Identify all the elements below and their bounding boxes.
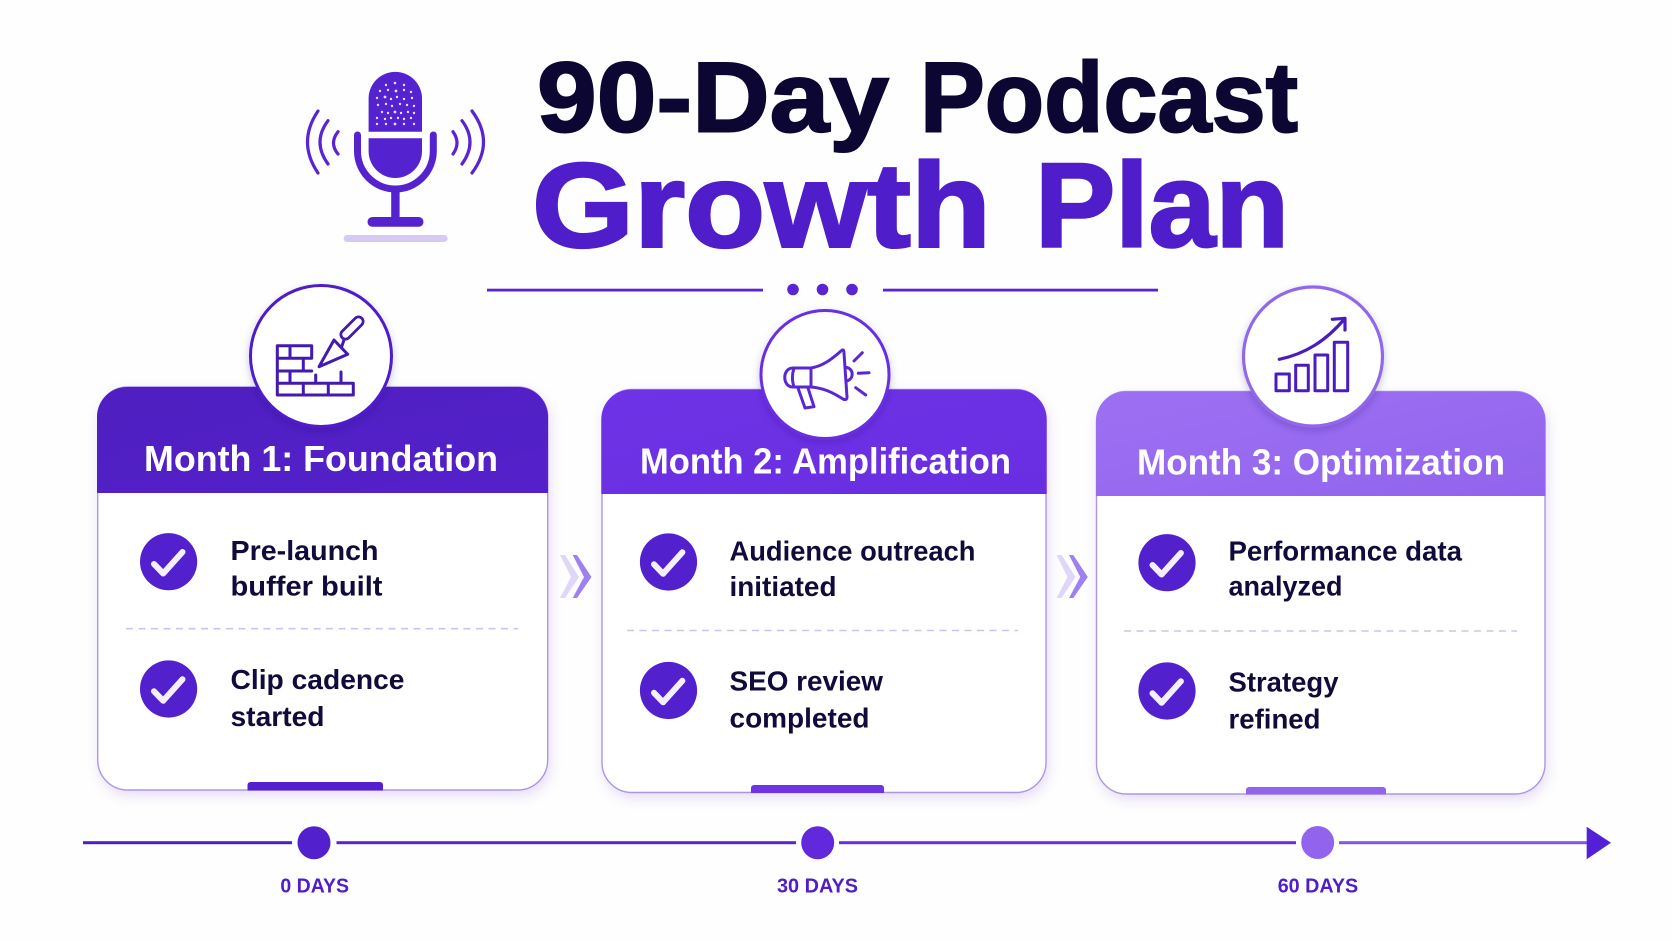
timeline line <box>83 841 1587 844</box>
checklist item: strategy refined <box>1138 662 1339 734</box>
card accent tab <box>1246 787 1386 794</box>
card body <box>1096 392 1545 794</box>
panel: month 1 foundation <box>97 286 548 790</box>
heading: Month 3: Optimization <box>1137 442 1505 482</box>
icon: rising bar chart <box>1244 287 1382 426</box>
panel: month 3 optimization <box>1096 287 1546 794</box>
microphone stem <box>391 190 400 220</box>
shadow bar <box>344 235 448 242</box>
card body <box>602 390 1046 792</box>
marker: 60 days: 60 DAYS <box>1278 876 1358 898</box>
arrow: chevrons 1 to 2 <box>560 555 592 598</box>
checklist item: audience outreach <box>640 533 976 602</box>
title word: 90-Day: 90-Day <box>537 42 889 153</box>
marker: 60 days <box>1278 826 1358 898</box>
heading: Month 2: Amplification <box>640 440 1011 482</box>
card accent tab <box>248 782 383 790</box>
checklist item: seo review: completed <box>730 702 870 734</box>
checklist item: pre-launch buffer: buffer built <box>230 571 382 602</box>
icon: megaphone <box>761 310 889 438</box>
card body <box>98 387 548 790</box>
microphone cradle <box>358 135 433 189</box>
heading: Month 1: Foundation <box>144 438 498 479</box>
card accent tab <box>751 785 884 793</box>
checklist item: seo review: SEO review <box>730 666 883 696</box>
panel: month 2 amplification <box>601 310 1047 793</box>
microphone head <box>369 72 422 132</box>
icon: brick wall and trowel <box>250 286 392 426</box>
card header <box>1096 392 1546 496</box>
checklist item: clip cadence: Clip cadence <box>230 664 404 695</box>
marker: 0 days <box>280 826 349 898</box>
checklist item: seo review <box>640 662 883 734</box>
card header <box>97 387 548 493</box>
checklist item: strategy refined: Strategy <box>1228 667 1339 698</box>
card header <box>601 390 1047 494</box>
marker: 30 days <box>777 826 858 898</box>
checklist item: clip cadence: started <box>230 701 324 732</box>
microphone lower cup <box>369 138 422 178</box>
title <box>532 42 1298 273</box>
checklist item: performance data: Performance data <box>1228 535 1462 566</box>
checklist item: strategy refined: refined <box>1228 704 1320 734</box>
sound waves <box>308 111 484 173</box>
arrow: chevrons 2 to 3 <box>1056 555 1088 598</box>
icon: podcast microphone <box>308 72 484 242</box>
checklist item: performance data <box>1138 534 1462 602</box>
checklist item: audience outreach: initiated <box>730 571 836 602</box>
checklist item: pre-launch buffer: Pre-launch <box>230 535 378 566</box>
marker: 0 days: 0 DAYS <box>280 876 349 898</box>
checklist item: audience outreach: Audience outreach <box>730 536 976 566</box>
timeline <box>83 826 1611 898</box>
title divider <box>487 284 1158 295</box>
checklist item: pre-launch buffer <box>140 533 382 602</box>
title word: Plan: Plan <box>1035 139 1289 273</box>
microphone base <box>368 217 424 227</box>
checklist item: performance data: analyzed <box>1228 571 1342 602</box>
title word: Growth: Growth <box>532 139 991 273</box>
arrowhead <box>1587 827 1611 859</box>
checklist item: clip cadence <box>140 660 404 732</box>
marker: 30 days: 30 DAYS <box>777 876 858 898</box>
title word: Podcast: Podcast <box>920 42 1298 153</box>
